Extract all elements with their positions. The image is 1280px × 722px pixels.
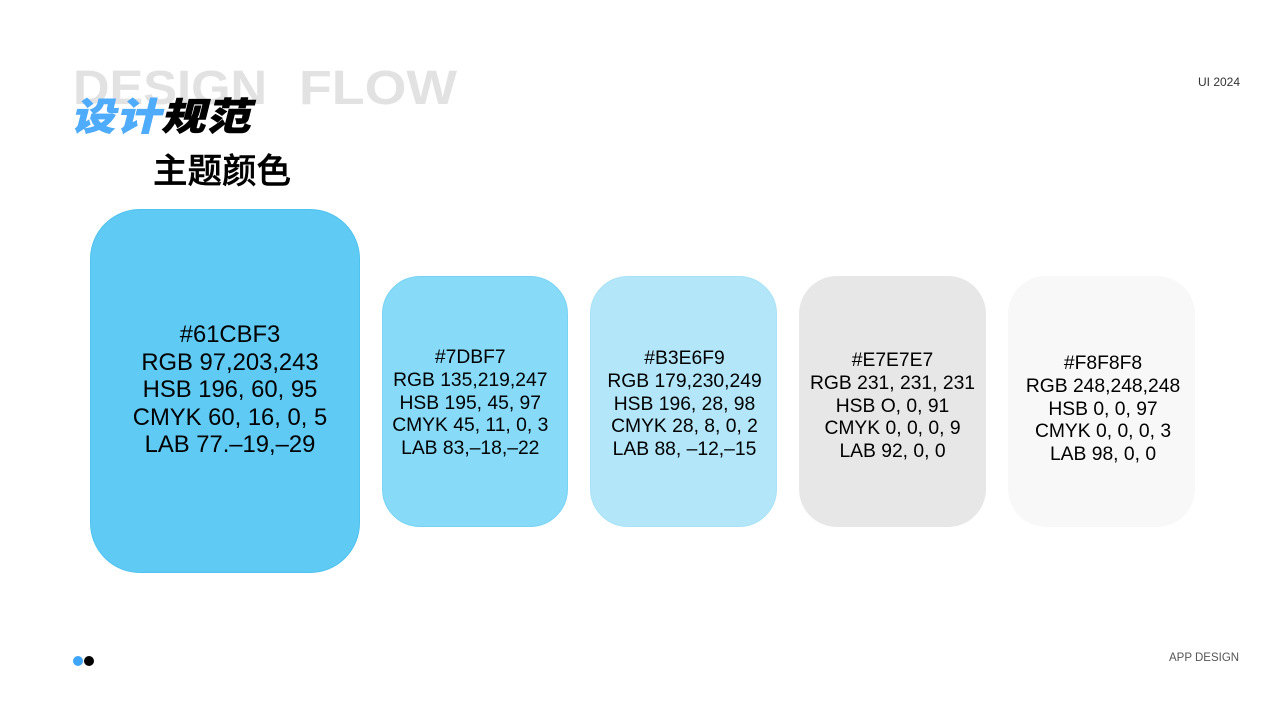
colour values: CMYK 45, 11, 0, 3 — [392, 415, 548, 436]
colour values: CMYK 0, 0, 0, 9 — [824, 418, 961, 439]
label: APP DESIGN: APP DESIGN — [1169, 652, 1239, 664]
colour values: CMYK 60, 16, 0, 5 — [133, 404, 327, 430]
colour values: RGB 135,219,247 — [393, 370, 547, 391]
colour values: HSB 0, 0, 97 — [1048, 399, 1158, 420]
colour values — [133, 321, 327, 458]
background title: DESIGN FLOW — [73, 62, 458, 110]
colour values: RGB 97,203,243 — [141, 348, 319, 376]
colour values: #61CBF3 — [180, 321, 280, 348]
colour values: #F8F8F8 — [1064, 353, 1142, 374]
colour values: CMYK 28, 8, 0, 2 — [611, 416, 758, 437]
panel: colour #61CBF3 — [90, 209, 360, 573]
colour values: RGB 231, 231, 231 — [810, 373, 975, 394]
colour values: LAB 77.–19,–29 — [145, 431, 315, 458]
colour values — [1026, 353, 1180, 465]
colour values: #E7E7E7 — [852, 350, 933, 371]
title: 设计规范: 设计规范 — [69, 96, 260, 138]
colour values: RGB 248,248,248 — [1026, 376, 1180, 397]
colour values: HSB O, 0, 91 — [836, 396, 949, 417]
panel: colour #7DBF7 — [382, 276, 568, 527]
colour values: LAB 92, 0, 0 — [839, 441, 946, 462]
colour values: RGB 179,230,249 — [607, 371, 762, 392]
colour values: #7DBF7 — [435, 347, 506, 368]
colour values: LAB 83,–18,–22 — [401, 438, 539, 459]
colour values — [607, 348, 762, 460]
colour values — [392, 347, 548, 459]
icon: pagination dots — [73, 656, 94, 666]
colour values: HSB 196, 28, 98 — [614, 394, 755, 415]
panel: colour #F8F8F8 — [1008, 276, 1195, 527]
colour values: LAB 88, –12,–15 — [613, 439, 756, 460]
panel: colour #E7E7E7 — [799, 276, 986, 527]
heading: 主题颜色: 主题颜色 — [153, 153, 291, 191]
label: UI 2024: UI 2024 — [1198, 75, 1240, 89]
colour values: #B3E6F9 — [644, 348, 725, 369]
colour values: LAB 98, 0, 0 — [1050, 444, 1156, 465]
colour values: CMYK 0, 0, 0, 3 — [1035, 421, 1171, 442]
colour values — [810, 350, 975, 462]
colour values: HSB 196, 60, 95 — [143, 376, 317, 403]
colour values: HSB 195, 45, 97 — [400, 393, 541, 414]
panel: colour #B3E6F9 — [590, 276, 777, 527]
